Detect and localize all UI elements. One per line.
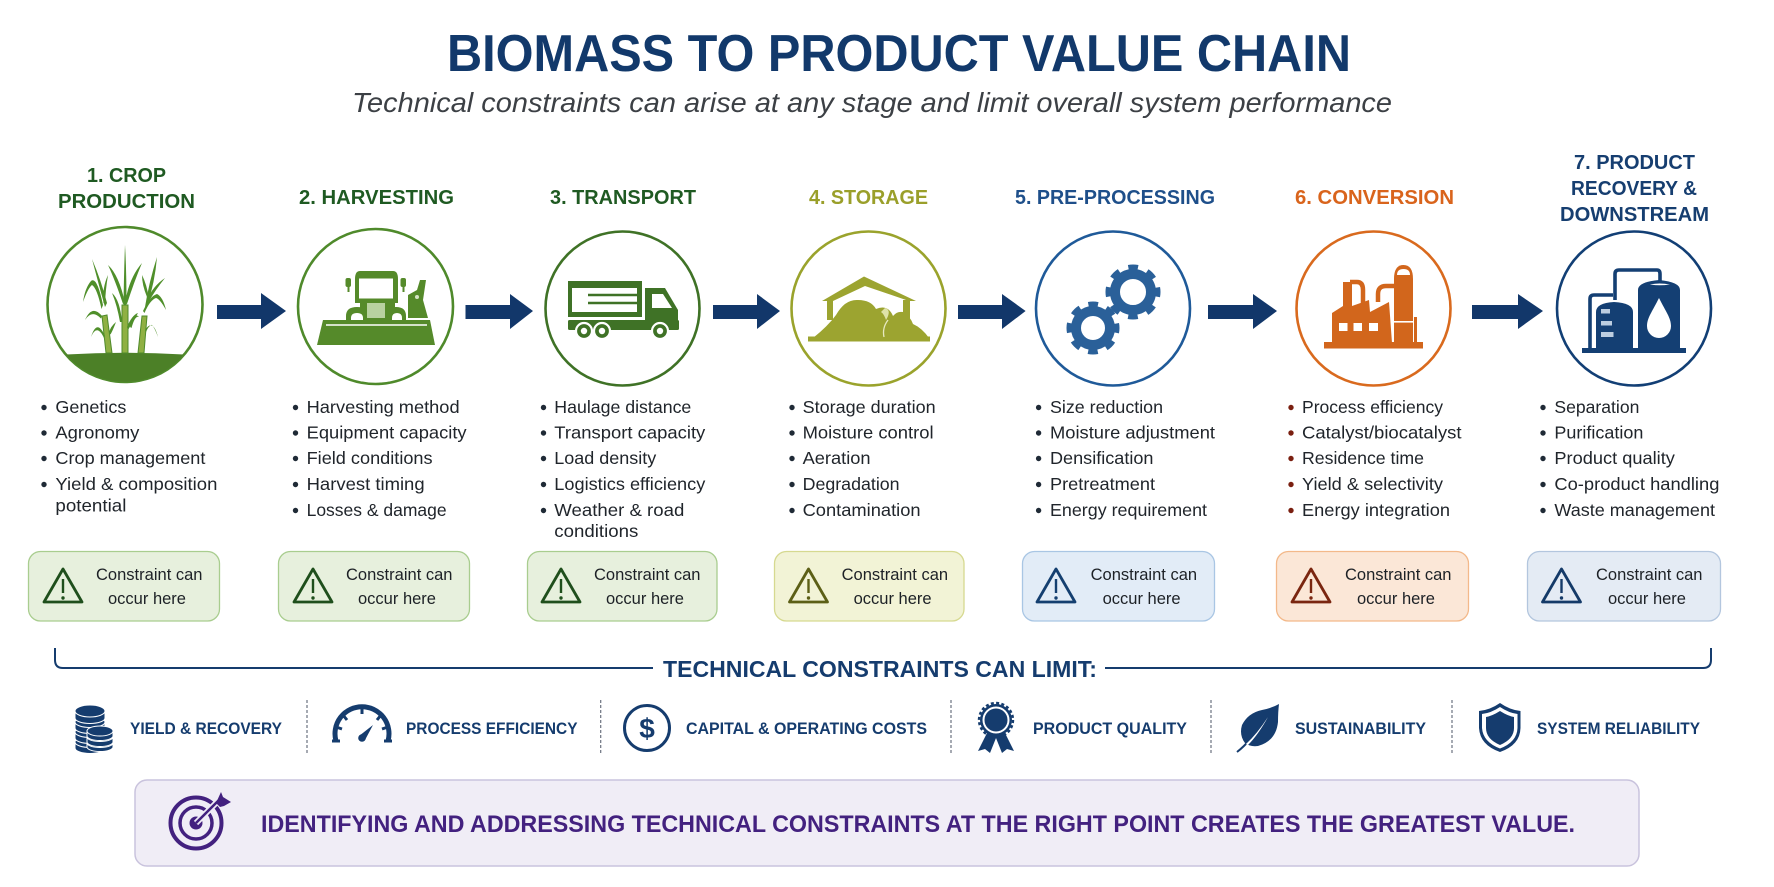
callout: constraint 4: Constraint can	[842, 566, 948, 584]
icon: dollar coin	[624, 706, 670, 750]
heading: crop production	[58, 165, 195, 213]
callout: constraint 3: occur here	[606, 590, 684, 608]
arrow: 5 to 6	[1208, 294, 1277, 329]
icon: factory in circle	[1296, 232, 1450, 386]
heading: pre-processing: 5. PRE-PROCESSING	[1015, 187, 1215, 209]
callout: constraint 2: Constraint can	[346, 566, 452, 584]
callout: constraint 5	[1022, 552, 1214, 621]
list: product recovery factors	[1540, 397, 1719, 520]
list: product recovery factors: Purification	[1554, 422, 1643, 442]
list: crop production factors: Crop management	[55, 448, 206, 468]
callout: constraint 4	[774, 552, 964, 621]
label: product quality: PRODUCT QUALITY	[1033, 719, 1188, 738]
list: harvesting factors: Losses & damage	[307, 500, 447, 520]
list: pre-processing factors: Energy requirement	[1050, 500, 1207, 520]
panel: stage 4 storage	[774, 187, 964, 621]
list: transport factors	[541, 397, 706, 541]
heading: product recovery and downstream: 7. PRODUCT	[1574, 152, 1695, 174]
list: product recovery factors: Separation	[1554, 397, 1639, 417]
callout: constraint 6: occur here	[1357, 590, 1435, 608]
message text: IDENTIFYING AND ADDRESSING TECHNICAL CONSTRAINTS AT THE RIGHT POINT CREATES THE GREATEST VALUE.	[261, 811, 1575, 838]
list: pre-processing factors: Densification	[1050, 448, 1154, 468]
icon: tractor in circle	[298, 229, 453, 384]
label: sustainability: SUSTAINABILITY	[1295, 719, 1427, 738]
list: conversion factors: Process efficiency	[1302, 397, 1443, 417]
callout: constraint 1: Constraint can	[96, 566, 202, 584]
callout: constraint 7: occur here	[1608, 590, 1686, 608]
icon: ribbon medal	[978, 703, 1014, 753]
icon: gears in circle	[1036, 232, 1190, 386]
heading: technical constraints can limit: TECHNICAL CONSTRAINTS CAN LIMIT:	[663, 656, 1097, 682]
callout: constraint 6: Constraint can	[1345, 566, 1452, 584]
title: BIOMASS TO PRODUCT VALUE CHAIN	[447, 25, 1351, 83]
callout: constraint 5: Constraint can	[1091, 566, 1197, 584]
callout: key message	[135, 780, 1639, 866]
list: harvesting factors	[293, 397, 467, 520]
list: conversion factors: Residence time	[1302, 448, 1424, 468]
arrow: 2 to 3	[466, 294, 533, 329]
list: transport factors: Weather & road	[554, 500, 684, 520]
list: storage factors: Aeration	[803, 448, 871, 468]
list: transport factors: Load density	[554, 448, 657, 468]
list: transport factors: conditions	[554, 521, 639, 541]
list: crop production factors: Yield & composition	[55, 474, 217, 494]
label: process efficiency: PROCESS EFFICIENCY	[406, 719, 578, 738]
list: harvesting factors: Harvesting method	[307, 397, 460, 417]
list: product recovery factors: Product quality	[1554, 448, 1675, 468]
heading: product recovery and downstream	[1560, 152, 1709, 226]
icon: gauge	[332, 707, 392, 742]
list: conversion factors: Catalyst/biocatalyst	[1302, 422, 1462, 442]
list: product recovery factors: Waste management	[1554, 500, 1715, 520]
callout: constraint 3: Constraint can	[594, 566, 700, 584]
label: yield and recovery: YIELD & RECOVERY	[130, 719, 283, 738]
icon: leaf	[1237, 704, 1279, 752]
list: pre-processing factors: Moisture adjustment	[1050, 422, 1215, 442]
heading: product recovery and downstream: RECOVERY &	[1571, 178, 1697, 200]
callout: constraint 5: occur here	[1103, 590, 1181, 608]
callout: constraint 4: occur here	[854, 590, 932, 608]
callout: constraint 3	[528, 552, 717, 621]
list: conversion factors	[1288, 397, 1462, 520]
panel: impact row	[75, 700, 1701, 755]
panel: stage 3 transport	[528, 187, 717, 621]
arrow: 6 to 7	[1472, 294, 1543, 329]
heading: conversion: 6. CONVERSION	[1295, 187, 1454, 209]
icon: target with arrow	[170, 792, 231, 848]
callout: constraint 7	[1528, 552, 1720, 621]
panel: stage 2 harvesting	[278, 187, 470, 621]
callout: constraint 7: Constraint can	[1596, 566, 1702, 584]
icon: coins	[75, 705, 113, 754]
panel: stage 1 crop production	[28, 165, 220, 621]
icon: shield	[1479, 703, 1520, 752]
list: crop production factors: Agronomy	[55, 422, 140, 442]
list: transport factors: Logistics efficiency	[554, 474, 706, 494]
icon: storage shed in circle	[792, 232, 946, 386]
bracket: technical constraints can limit	[55, 648, 1711, 682]
arrow: 1 to 2	[217, 293, 286, 329]
label: capital and operating costs: CAPITAL & OPERATING COSTS	[686, 719, 927, 738]
heading: transport: 3. TRANSPORT	[550, 187, 696, 209]
list: pre-processing factors: Pretreatment	[1050, 474, 1155, 494]
list: storage factors: Storage duration	[803, 397, 936, 417]
heading: storage: 4. STORAGE	[809, 187, 928, 209]
icon: truck in circle	[546, 232, 700, 386]
list: storage factors: Moisture control	[803, 422, 934, 442]
icon: dollar coin: $	[639, 713, 655, 744]
arrow: 4 to 5	[958, 294, 1026, 329]
list: harvesting factors: Equipment capacity	[307, 422, 467, 442]
list: transport factors: Transport capacity	[554, 422, 706, 442]
list: conversion factors: Yield & selectivity	[1302, 474, 1443, 494]
list: pre-processing factors	[1036, 397, 1215, 520]
panel: stage 6 conversion	[1276, 187, 1468, 621]
list: transport factors: Haulage distance	[554, 397, 691, 417]
list: harvesting factors: Harvest timing	[307, 474, 425, 494]
list: crop production factors: Genetics	[55, 397, 127, 417]
heading: harvesting: 2. HARVESTING	[299, 187, 454, 209]
list: storage factors: Degradation	[803, 474, 900, 494]
callout: constraint 2	[278, 552, 470, 621]
panel: stage 7 product recovery	[1528, 152, 1720, 621]
heading: crop production: PRODUCTION	[58, 191, 195, 213]
list: crop production factors	[41, 397, 217, 516]
heading: crop production: 1. CROP	[87, 165, 166, 187]
subtitle: Technical constraints can arise at any stage and limit overall system performance	[352, 87, 1392, 118]
callout: constraint 1: occur here	[108, 590, 186, 608]
panel: stage 5 pre-processing	[1015, 187, 1215, 621]
icon: sugarcane in circle	[48, 227, 202, 382]
list: conversion factors: Energy integration	[1302, 500, 1450, 520]
heading: product recovery and downstream: DOWNSTREAM	[1560, 204, 1709, 226]
callout: constraint 1	[28, 552, 220, 621]
list: crop production factors: potential	[55, 496, 126, 516]
callout: constraint 6	[1276, 552, 1468, 621]
list: storage factors	[789, 397, 936, 520]
arrow: 3 to 4	[713, 294, 780, 329]
list: storage factors: Contamination	[803, 500, 921, 520]
icon: tanks with droplet in circle	[1557, 232, 1711, 386]
callout: constraint 2: occur here	[358, 590, 436, 608]
list: harvesting factors: Field conditions	[307, 448, 433, 468]
list: product recovery factors: Co-product handling	[1554, 474, 1719, 494]
list: pre-processing factors: Size reduction	[1050, 397, 1163, 417]
label: system reliability: SYSTEM RELIABILITY	[1537, 719, 1701, 738]
